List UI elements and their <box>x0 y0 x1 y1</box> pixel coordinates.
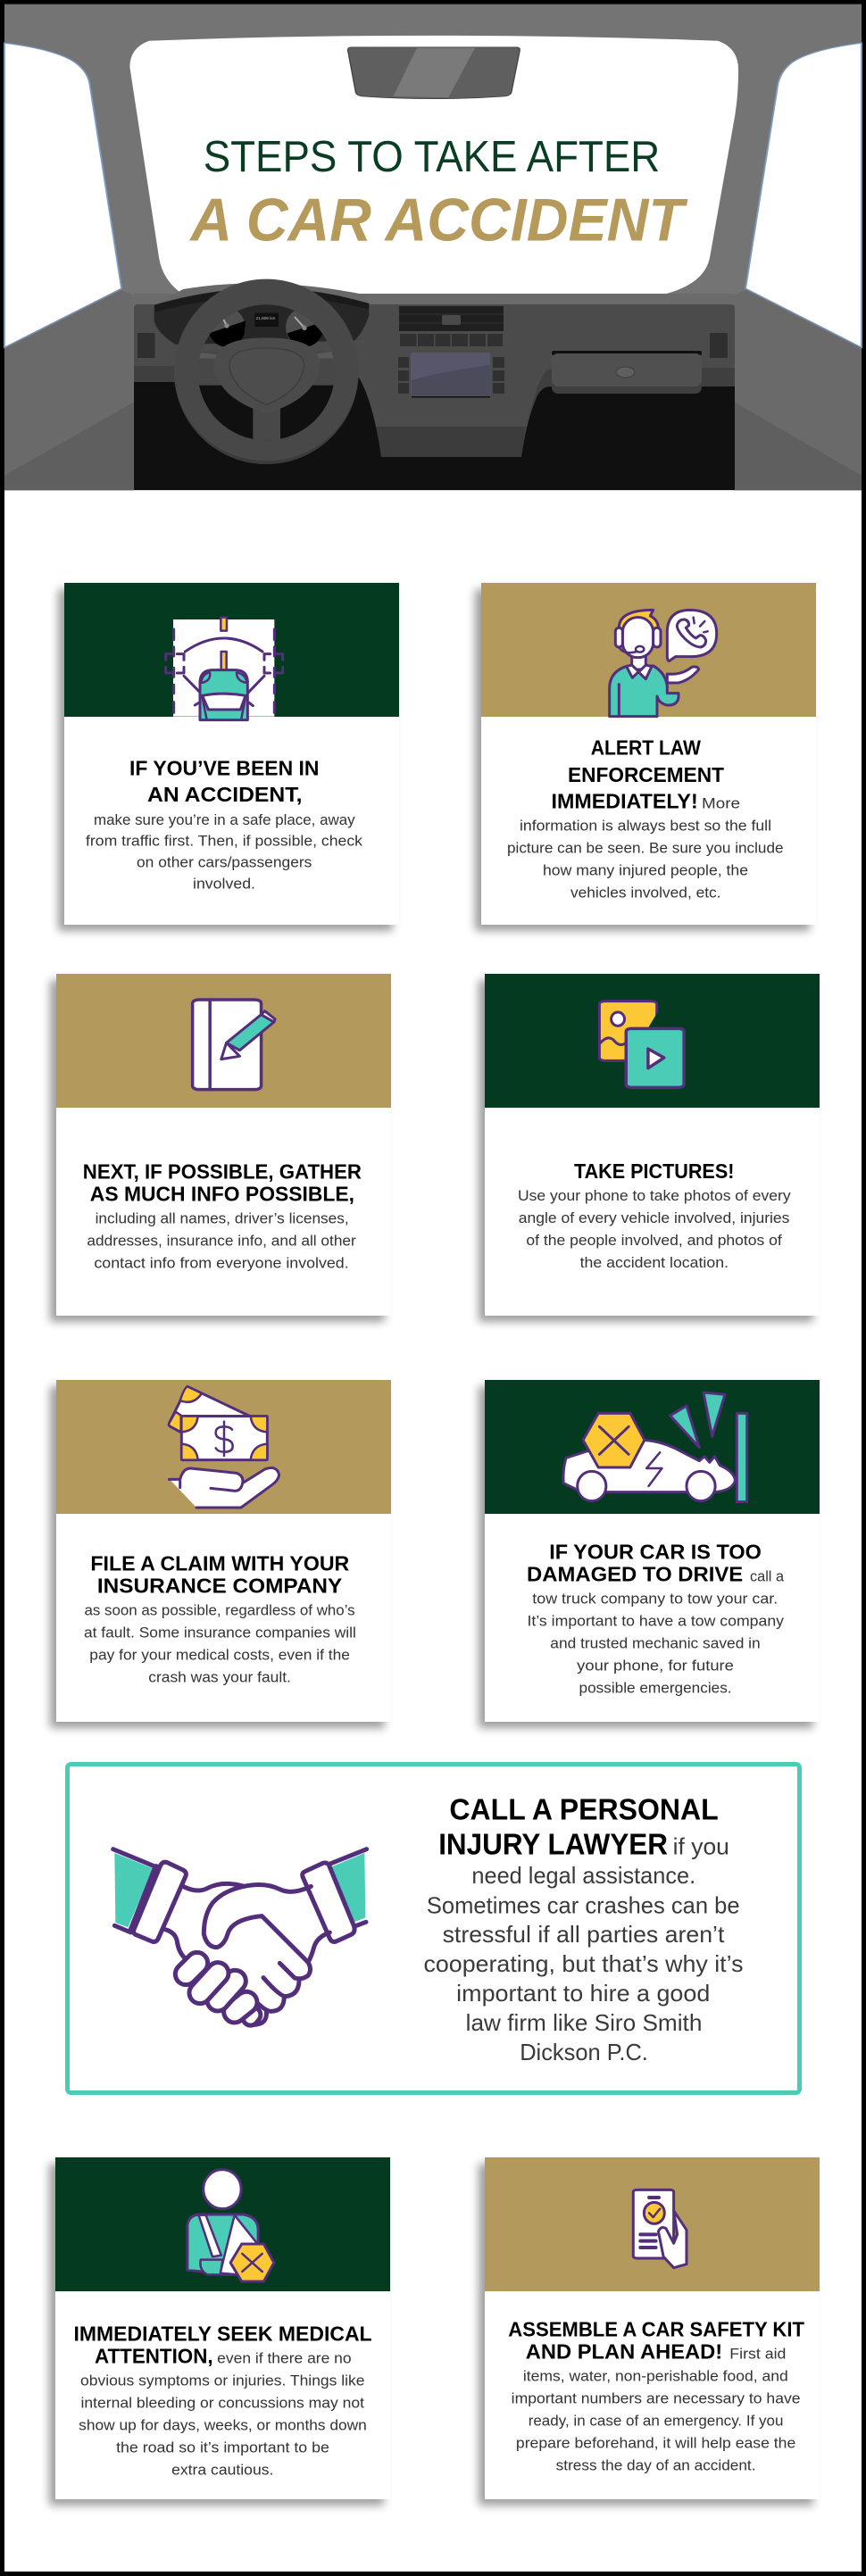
icon: photo and video cards <box>599 1001 684 1087</box>
glove box <box>552 351 702 394</box>
text: possible emergencies. <box>579 1680 732 1697</box>
text: ATTENTION, <box>95 2344 213 2367</box>
text <box>84 1552 356 1686</box>
text: FILE A CLAIM WITH YOUR <box>90 1552 349 1575</box>
windshield <box>129 36 738 294</box>
text: show up for days, weeks, or months down <box>79 2416 367 2433</box>
text: It’s important to have a tow company <box>527 1613 785 1630</box>
text: including all names, driver’s licenses, <box>96 1210 349 1227</box>
title: STEPS TO TAKE AFTER <box>204 133 660 181</box>
card 1: if you've been in an accident <box>58 583 399 931</box>
text: CALL A PERSONAL <box>449 1792 719 1825</box>
text: items, water, non-perishable food, and <box>523 2367 788 2384</box>
text: IF YOU’VE BEEN IN <box>129 756 320 779</box>
fingers <box>186 1963 253 2018</box>
right side window <box>745 43 862 347</box>
icon: person with sling <box>187 2170 274 2281</box>
text: IMMEDIATELY! <box>552 790 698 813</box>
side vents <box>137 333 155 358</box>
card 8: assemble a car safety kit <box>479 2157 820 2505</box>
card 5: file a claim <box>50 1380 391 1728</box>
icon: hand holding phone checklist <box>633 2190 687 2268</box>
title <box>188 133 688 254</box>
text <box>527 1541 785 1697</box>
text: from traffic first. Then, if possible, check <box>86 833 363 850</box>
text: obvious symptoms or injuries. Things like <box>80 2372 364 2389</box>
text <box>86 756 363 893</box>
text: prepare beforehand, it will help ease the <box>516 2434 795 2451</box>
text: information is always best so the full <box>520 818 771 835</box>
text: IMMEDIATELY SEEK MEDICAL <box>73 2322 372 2345</box>
text: vehicles involved, etc. <box>570 885 721 902</box>
text: More <box>702 795 740 812</box>
card 2: alert law enforcement <box>475 583 816 931</box>
text: law firm like Siro Smith <box>466 2009 702 2036</box>
text: internal bleeding or concussions may not <box>80 2394 364 2411</box>
text: of the people involved, and photos of <box>526 1232 782 1249</box>
icon: car on road <box>166 618 283 720</box>
text: your phone, for future <box>577 1658 734 1674</box>
card 7: seek medical attention <box>49 2157 390 2505</box>
card 3: gather info <box>50 974 391 1322</box>
text: ready, in case of an emergency. If you <box>529 2412 784 2429</box>
text: Use your phone to take photos of every <box>518 1187 791 1204</box>
text: AN ACCIDENT, <box>147 783 302 806</box>
text: Dickson P.C. <box>520 2039 648 2065</box>
text: need legal assistance. <box>471 1862 695 1889</box>
text: contact info from everyone involved. <box>94 1255 349 1272</box>
dashboard <box>134 294 735 490</box>
text: make sure you’re in a safe place, away <box>94 811 355 828</box>
steering wheel and instrument cluster: 21,809 km <box>256 316 276 320</box>
footwell <box>134 378 735 490</box>
right door panel <box>735 290 862 490</box>
text <box>83 1160 362 1272</box>
steering wheel and instrument cluster <box>154 279 369 464</box>
header: car interior illustration <box>4 4 862 490</box>
text: extra cautious. <box>171 2461 273 2478</box>
panel: call a personal injury lawyer <box>68 1764 800 2092</box>
text: crash was your fault. <box>148 1669 291 1686</box>
text: NEXT, IF POSSIBLE, GATHER <box>83 1160 362 1184</box>
text: ALERT LAW <box>591 736 702 760</box>
text: cooperating, but that’s why it’s <box>423 1950 743 1977</box>
card 6: car too damaged <box>479 1380 820 1728</box>
text: even if there are no <box>217 2349 352 2366</box>
left door panel <box>4 290 134 490</box>
text: INJURY LAWYER <box>438 1827 668 1860</box>
text: ASSEMBLE A CAR SAFETY KIT <box>508 2317 805 2340</box>
text: angle of every vehicle involved, injuries <box>519 1209 789 1226</box>
text: addresses, insurance info, and all other <box>87 1233 356 1250</box>
text: and trusted mechanic saved in <box>550 1635 761 1652</box>
text: the accident location. <box>580 1254 729 1271</box>
text: IF YOUR CAR IS TOO <box>549 1541 762 1564</box>
text: stressful if all parties aren’t <box>443 1921 725 1948</box>
text <box>73 2322 372 2478</box>
text: pay for your medical costs, even if the <box>89 1647 350 1664</box>
air vents <box>399 306 504 331</box>
text: important to hire a good <box>456 1980 710 2007</box>
icon: notebook and pencil <box>193 1000 275 1090</box>
card 4: take pictures <box>479 974 820 1322</box>
text: picture can be seen. Be sure you include <box>507 840 784 857</box>
button row <box>400 334 503 346</box>
text: involved. <box>193 876 255 893</box>
center screen <box>398 353 504 398</box>
text: ENFORCEMENT <box>568 763 725 786</box>
text: TAKE PICTURES! <box>574 1159 734 1183</box>
text: how many injured people, the <box>543 862 748 879</box>
text: the road so it’s important to be <box>116 2439 329 2456</box>
text: if you <box>673 1832 729 1859</box>
text: tow truck company to tow your car. <box>532 1591 778 1608</box>
text: stress the day of an accident. <box>556 2456 755 2473</box>
text: AND PLAN AHEAD! <box>526 2339 722 2363</box>
icon: handshake <box>113 1849 367 2024</box>
text: DAMAGED TO DRIVE <box>527 1563 743 1586</box>
text: call a <box>750 1568 785 1585</box>
title: A CAR ACCIDENT <box>188 187 688 254</box>
text: Sometimes car crashes can be <box>427 1891 740 1918</box>
text: First aid <box>729 2345 786 2362</box>
text: on other cars/passengers <box>137 854 312 871</box>
icon: crashed car <box>563 1392 747 1502</box>
text <box>508 2317 805 2473</box>
text: at fault. Some insurance companies will <box>84 1625 356 1641</box>
text: INSURANCE COMPANY <box>97 1575 343 1598</box>
rear view mirror <box>348 47 520 99</box>
icon: money over hand <box>169 1386 279 1508</box>
text <box>507 736 784 902</box>
text: AS MUCH INFO POSSIBLE, <box>90 1183 354 1206</box>
icon: operator with phone bubble <box>610 610 717 717</box>
left side window <box>4 43 121 347</box>
text <box>423 1792 743 2065</box>
text <box>518 1159 791 1271</box>
text: as soon as possible, regardless of who’s <box>84 1602 355 1619</box>
text: important numbers are necessary to have <box>512 2389 800 2406</box>
